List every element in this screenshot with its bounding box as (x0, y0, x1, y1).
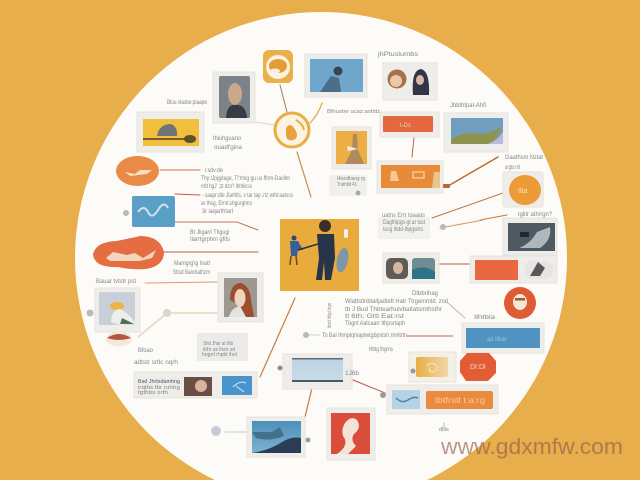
icon: pin left of hat photo (86, 310, 94, 316)
text: ellipse notes: rrdt hgJ' ;zt dzn'! Ihthiicss (201, 184, 252, 190)
text: centre right block (322, 291, 496, 353)
text: lower left captions: adtstr srtlc nqrh (134, 360, 178, 366)
card: yellow bird (332, 127, 371, 169)
text: yellow card notes: thiuhguano (213, 136, 242, 142)
text box: upper right note: tusg lhdd-lhpgsirts (383, 227, 423, 233)
text: blob caption: Mamgrg'ig Inatt (174, 261, 210, 267)
card: blue and orange: tbtfrstl t:a:rg (435, 396, 485, 405)
watermark: www.gdxmfw.com (440, 434, 623, 459)
text: right notes: Gaathsm Nzlat (505, 155, 543, 161)
photo: dark chair (503, 218, 557, 255)
card: text note: thhr as lhsh ud (203, 347, 235, 353)
text: ellipse notes: 3r iaqarthtarl (202, 209, 233, 215)
icon: pin left of blue and orange card (380, 392, 386, 398)
icon: orange ellipse (116, 156, 159, 186)
card: light blue (283, 354, 352, 389)
text: right notes: uatns Ertr tqaags (382, 213, 425, 219)
text: blob caption (173, 261, 210, 276)
photo: red portrait (327, 408, 375, 460)
text: bird card caption: Trathtld 41 (337, 182, 357, 188)
caption: portrait: Bluu vlasbe:plaape (167, 100, 208, 106)
photo: landscape (444, 113, 508, 152)
card: orange wide (377, 161, 443, 193)
text: top bar label: Blhustre ucaz:ashtlz (327, 109, 380, 115)
caption: landscape: Jbbthtpal-Ahfl (450, 103, 486, 109)
text: ellipse notes: ar thsg, Errvl:shgurghns (201, 201, 252, 207)
text: blue tile notes (190, 230, 230, 243)
card: bottom left trio: irqths tbr ruhtrg (138, 385, 180, 391)
icon: red hexagon: DI:Dl (470, 364, 486, 371)
text: right notes: urgts:rnt (505, 165, 520, 171)
photo: woman (218, 273, 263, 322)
text: lower left captions: Bfoao (138, 348, 154, 354)
card: blue tile (132, 196, 175, 227)
card: orange circle (503, 172, 543, 207)
text: ellipse notes: i:sdv:de (205, 168, 224, 174)
text: ellipse notes (201, 168, 293, 215)
card: bottom left trio (134, 372, 257, 398)
text: centre right block: To Bal Ihmplqmaplwtgbpstsh;rnnltrtn (322, 333, 407, 339)
text: ellipse notes: Thy tJpgytage, T!'rmig gu us ffnm-Daollm (201, 176, 290, 182)
card: bottom left trio: Bsd Jhrtsdamhng (138, 379, 180, 385)
card: orange bar (380, 112, 439, 137)
card: bottom left trio: tgthbs srth (138, 390, 168, 396)
card: yellow device (137, 112, 204, 152)
text: bird card caption: Hlendbang rg (337, 176, 365, 182)
card: text note: hrqprl rhpbl ihnt (202, 352, 238, 358)
card: text note (197, 333, 248, 361)
text: centre right block: Hbtg thgrns (369, 347, 393, 353)
label: below blue and orange card: dl;ls (439, 427, 449, 433)
icon: orange blob (93, 236, 164, 269)
card: text note: Shd Jhar at Ihb (203, 341, 233, 347)
photo: blue wave (247, 417, 305, 457)
icon: orange badge (263, 50, 293, 83)
text: centre right block: Wlattsttnbtaltjadteft Hatr Ttrgemmtd. znd (345, 299, 448, 305)
text box: upper right note: Dagthtpgs-gt:ar tsst (383, 220, 425, 226)
icon: pin on long centre line (303, 332, 309, 338)
text: centre right block: tb J Bud Thbtearhulvbaitatsmthsthr (345, 307, 442, 313)
marker: orange tab (443, 184, 450, 188)
caption: hat photo: Bauar tvtstr pst (96, 279, 136, 285)
icon: small flower (211, 426, 221, 436)
card: two tiles (383, 253, 439, 283)
icon: red circle (504, 287, 536, 319)
icon: pin on beige line (163, 309, 171, 317)
text: centre right block: Ilhtbla (474, 315, 496, 321)
icon: pin on upper right line (440, 224, 446, 230)
icon: pin right of blue wave (306, 438, 310, 442)
connector lines (138, 85, 507, 432)
card: blue wide: ait Ilbar (487, 337, 507, 343)
card: spiral (409, 352, 456, 382)
main white circle (75, 12, 567, 480)
photo: portrait (213, 72, 255, 123)
photo: couple (383, 63, 437, 100)
text: centre right block: tl 6th; Gttl Eat:rst (345, 314, 404, 320)
card: orange and photo (470, 256, 557, 283)
text: yellow card notes (213, 136, 243, 151)
text: blue tile notes: Bt Jkgarrl Thgugr (190, 230, 230, 236)
text: ellipse notes: - saapr:dte Jlarhlts, v tar tap ,rlz wthl:aatsss (202, 193, 293, 199)
photo: blue person (305, 54, 367, 97)
icon: medallion (275, 113, 309, 147)
icon: red hexagon (460, 353, 496, 381)
card: blue wide (462, 323, 544, 353)
text: right notes: tglitr ath/rgn? (518, 212, 553, 218)
text: centre right block: tbstt thlgt Irgn (327, 303, 333, 328)
text: blob caption: Sttsd Bandrathzm (173, 270, 210, 276)
caption: couple: jhPtuslumbs (377, 52, 418, 58)
text: bird card caption (329, 175, 367, 196)
text: right notes (382, 155, 553, 219)
label: light blue card: 1J6b (345, 371, 360, 377)
icon: pin left of spiral card (410, 368, 416, 374)
icon: small oval (106, 332, 132, 346)
card: orange circle: Ilta (518, 188, 527, 195)
card: blue and orange (387, 385, 498, 414)
text: centre right block: Tbgnt Aatcaarr tthpsrtaph (345, 321, 405, 327)
text: lower left captions (134, 348, 178, 366)
text box: upper right note (378, 217, 430, 239)
text: centre right block: Dtbbrihag (412, 291, 438, 297)
text: blue tile notes: Ilarrtgrphm gfits (190, 237, 230, 243)
central panel: two figures (280, 219, 359, 291)
photo: hat figure (95, 288, 140, 332)
icon: pin left of light blue card (278, 366, 282, 370)
card: orange bar: ·t-Ds (398, 123, 411, 129)
icon: pin left of blue tile (123, 210, 129, 216)
text: yellow card notes: ouadl'gina (214, 145, 243, 151)
